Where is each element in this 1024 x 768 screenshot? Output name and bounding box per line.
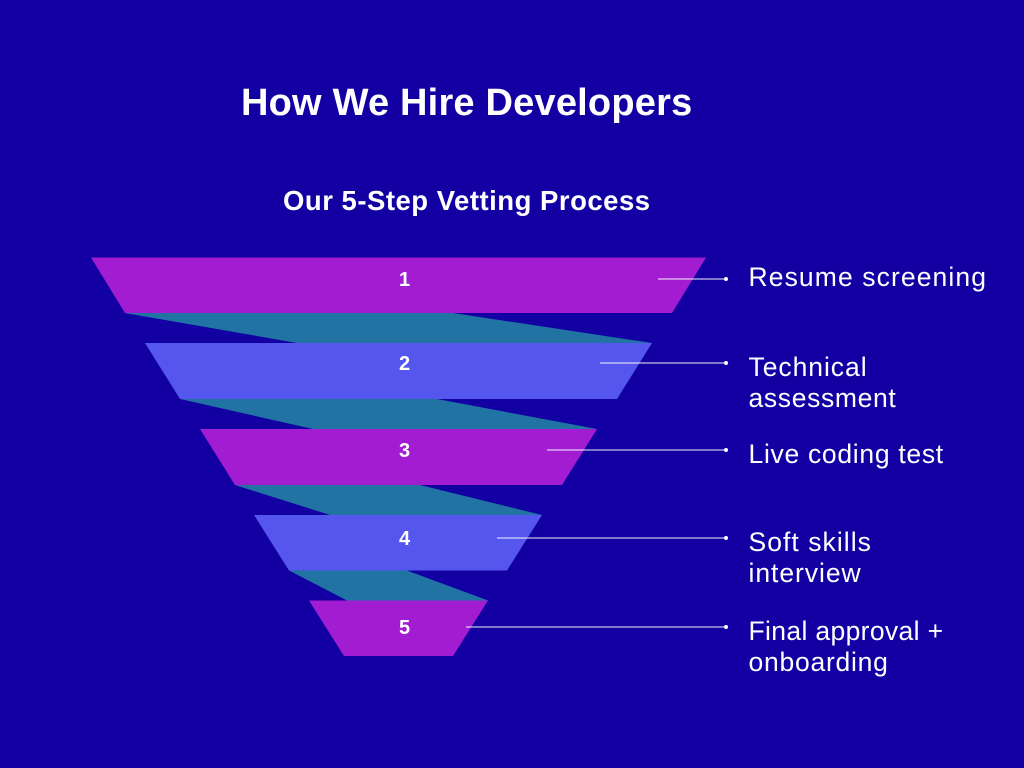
label: step 3: Live coding test (748, 438, 944, 468)
arrow: step 2 (600, 361, 728, 365)
subtitle: Our 5-Step Vetting Process (283, 184, 651, 216)
funnel step 2: 2 (399, 353, 410, 375)
arrow: step 5 (466, 625, 728, 629)
label: step 2 (748, 352, 896, 412)
funnel step 4: 4 (399, 528, 411, 550)
label: step 4: interview (748, 558, 862, 588)
funnel step 3: 3 (399, 440, 410, 462)
connector: step 3 to 4 (235, 485, 542, 515)
arrow: step 3 (547, 448, 728, 452)
label: step 5: Final approval + (748, 616, 943, 646)
label: step 4: Soft skills (748, 526, 872, 556)
funnel step 3 (200, 429, 597, 485)
arrow: step 4 (497, 536, 728, 540)
label: step 2: Technical (748, 352, 868, 382)
funnel step 5 (309, 600, 488, 656)
label: step 1: Resume screening (748, 262, 987, 292)
funnel step 2 (145, 343, 652, 399)
funnel step 4 (254, 515, 542, 570)
funnel step 5: 5 (399, 617, 410, 639)
funnel step 1 (91, 258, 706, 313)
connector: step 1 to 2 (125, 313, 652, 343)
label: step 4 (748, 526, 872, 588)
connector: step 2 to 3 (180, 399, 597, 429)
label: step 2: assessment (748, 382, 896, 412)
funnel step 1: 1 (399, 269, 410, 291)
label: step 5 (748, 616, 943, 676)
arrow: step 1 (658, 277, 728, 281)
connector: step 4 to 5 (289, 570, 488, 600)
title: How We Hire Developers (241, 82, 692, 124)
label: step 5: onboarding (748, 646, 889, 676)
